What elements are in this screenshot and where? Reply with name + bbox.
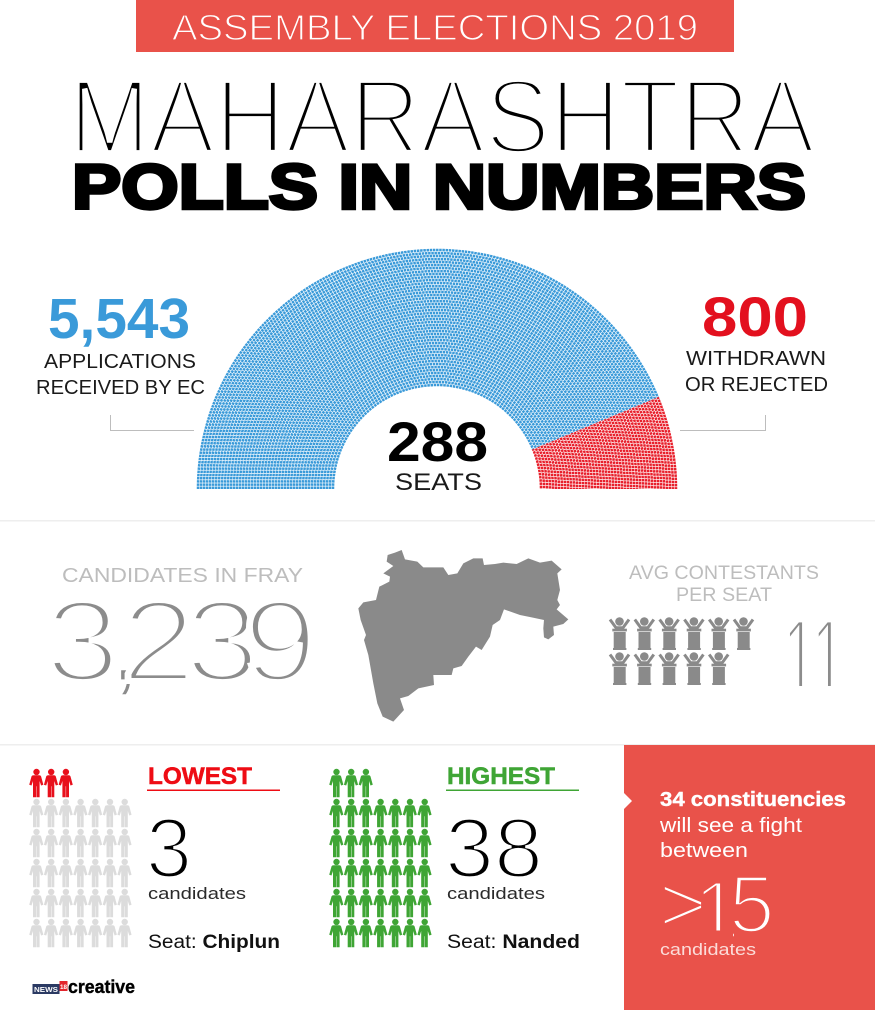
semicircle seat chart: [198, 250, 676, 489]
seats label: [387, 410, 488, 496]
title: Polls in numbers: POLLS IN NUMBERS: [72, 152, 806, 222]
header banner: [136, 0, 734, 52]
logo: News18 Creative: NEWS: [34, 985, 58, 994]
panel: 34 constituencies callout: between: [660, 839, 748, 862]
stat: candidates in fray: 3: [45, 577, 120, 706]
stat: candidates in fray: 3: [185, 577, 259, 706]
stat: applications received: APPLICATIONS: [44, 350, 196, 373]
lowest value: [146, 801, 280, 953]
panel: 34 constituencies callout: [624, 745, 875, 1010]
panel: 34 constituencies callout: candidates: [660, 940, 756, 959]
map of Maharashtra: [358, 550, 568, 722]
highest value: Seat: Nanded: [447, 932, 580, 953]
lowest value: candidates: [148, 884, 246, 903]
stat: candidates in fray: 2: [121, 577, 196, 706]
highest value: candidates: [447, 884, 545, 903]
icons: highest candidates people grid: [330, 769, 431, 947]
stat: withdrawn or rejected: 800: [702, 285, 808, 348]
stat: candidates in fray: [45, 564, 317, 706]
highest value: 38: [445, 801, 543, 895]
logo: News18 Creative: [32, 977, 135, 997]
highest heading: HIGHEST: [447, 763, 555, 790]
divider: [0, 744, 875, 746]
panel: 34 constituencies callout: >: [659, 859, 707, 950]
stat: applications received: 5,543: [48, 287, 190, 351]
lowest heading: LOWEST: [148, 763, 252, 790]
stat: withdrawn or rejected: WITHDRAWN: [686, 347, 826, 370]
stat: average contestants: PER SEAT: [676, 585, 772, 606]
stat: applications received: [36, 287, 205, 399]
icons: contestants at podiums: [610, 617, 753, 685]
highest value: [445, 801, 580, 953]
stat: candidates in fray: ,: [107, 577, 144, 706]
seats label: 288: [387, 410, 488, 473]
title: Maharashtra: MAHARASHTRA: [69, 58, 815, 176]
panel: 34 constituencies callout: 1: [694, 865, 740, 956]
seats label: SEATS: [395, 469, 482, 496]
leader line right: [680, 415, 766, 430]
header banner: ASSEMBLY ELECTIONS 2019: [172, 7, 698, 48]
stat: withdrawn or rejected: [685, 285, 828, 396]
lowest value: 3: [146, 801, 192, 895]
panel: 34 constituencies callout: 34 constituencies: [660, 789, 846, 811]
logo: News18 Creative: creative: [68, 977, 135, 997]
panel: 34 constituencies callout: 5: [729, 859, 775, 950]
panel: 34 constituencies callout: will see a fight: [659, 814, 802, 837]
stat: withdrawn or rejected: OR REJECTED: [685, 373, 828, 396]
stat: average contestants: AVG CONTESTANTS: [629, 563, 819, 584]
stat: candidates in fray: 9: [243, 577, 317, 706]
stat: applications received: RECEIVED BY EC: [36, 376, 205, 399]
stat: average contestants: [629, 563, 819, 606]
leader line left: [110, 415, 194, 430]
icons: lowest candidates people grid: [30, 769, 131, 947]
divider: [0, 520, 875, 522]
lowest value: Seat: Chiplun: [148, 932, 280, 953]
logo: News18 Creative: 18: [60, 984, 67, 991]
stat: candidates in fray: CANDIDATES IN FRAY: [62, 564, 303, 587]
